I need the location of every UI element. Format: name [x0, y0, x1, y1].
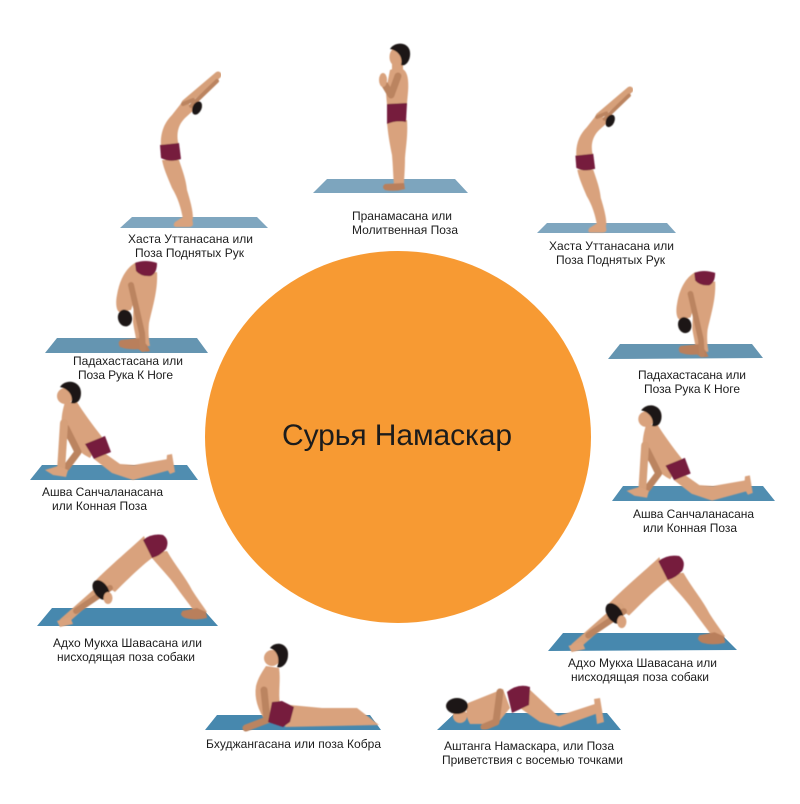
mat [437, 713, 621, 730]
label: Приветствия с восемью точками [442, 753, 623, 767]
pose: Ашва Санчаланасана right [612, 405, 775, 535]
label [549, 239, 674, 267]
pose: Ашва Санчаланасана left [30, 382, 198, 513]
label: Молитвенная Поза [352, 223, 458, 237]
mat [205, 715, 381, 730]
pose: Бхуджангасана [205, 644, 381, 751]
pose: Аштанга Намаскара [437, 686, 623, 767]
figure [569, 556, 725, 652]
label [42, 485, 163, 513]
label: или Конная Поза [643, 521, 737, 535]
figure [446, 686, 604, 727]
figure [57, 535, 207, 627]
mat [608, 344, 763, 359]
label [633, 507, 754, 535]
label [128, 232, 253, 260]
label: Ашва Санчаланасана [633, 507, 754, 521]
label: Адхо Мукха Шавасана или [53, 636, 202, 650]
label: Падахастасана или [73, 354, 183, 368]
figure [676, 271, 715, 357]
label: Ашва Санчаланасана [42, 485, 163, 499]
title: Сурья Намаскар [282, 419, 512, 452]
central circle [205, 251, 591, 623]
label: Поза Поднятых Рук [556, 253, 666, 267]
pose: Адхо Мукха Шавасана right [548, 556, 737, 684]
pose: Падахастасана right [608, 271, 763, 396]
label: Поза Поднятых Рук [135, 246, 245, 260]
label: Аштанга Намаскара, или Поза [444, 739, 614, 753]
label: Пранамасана или [352, 209, 452, 223]
label: Хаста Уттанасана или [128, 232, 253, 246]
figure [160, 75, 218, 227]
label [638, 368, 746, 396]
label [442, 739, 623, 767]
mat [537, 223, 676, 233]
label: Поза Рука К Ноге [644, 382, 740, 396]
mat [37, 608, 218, 626]
mat [612, 486, 775, 501]
mat [30, 465, 198, 480]
figure [575, 90, 630, 233]
pose: Пранамасана [313, 44, 468, 237]
pose: Падахастасана left [45, 261, 208, 382]
label: Поза Рука К Ноге [78, 368, 173, 382]
figure [627, 405, 753, 501]
label: Падахастасана или [638, 368, 746, 382]
figure [116, 261, 157, 352]
mat [120, 217, 268, 228]
label: Хаста Уттанасана или [549, 239, 674, 253]
label [568, 656, 717, 684]
mat [313, 179, 468, 193]
pose: Хаста Уттанасана left [120, 75, 268, 260]
label: нисходящая поза собаки [571, 670, 709, 684]
label: или Конная Поза [52, 499, 147, 513]
pose: Хаста Уттанасана right [537, 90, 676, 267]
mat [45, 338, 208, 353]
label: нисходящая поза собаки [57, 650, 195, 664]
label: Бхуджангасана или поза Кобра [206, 737, 381, 751]
figure [45, 382, 175, 480]
label [352, 209, 458, 237]
pose: Адхо Мукха Шавасана left [37, 535, 218, 664]
mat [548, 633, 737, 651]
label [53, 636, 202, 664]
figure [379, 44, 410, 191]
label [73, 354, 183, 382]
figure [246, 644, 379, 728]
label: Адхо Мукха Шавасана или [568, 656, 717, 670]
